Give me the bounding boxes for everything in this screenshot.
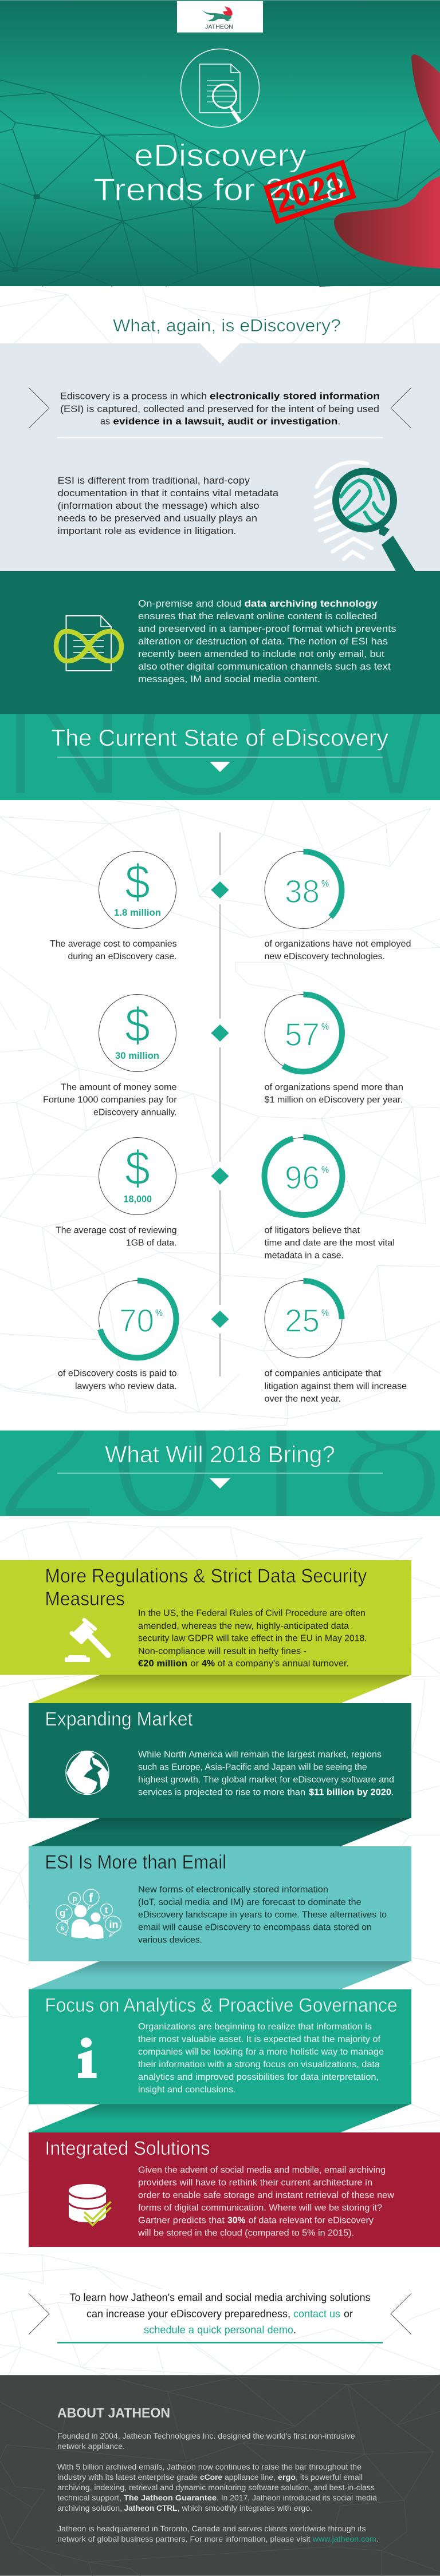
body text: highest growth. The global market for eDiscovery software and xyxy=(138,1775,394,1785)
ghost word: N xyxy=(0,631,130,836)
icon: social people xyxy=(56,1889,121,1939)
timeline xyxy=(211,832,229,1376)
title: eDiscovery xyxy=(134,137,307,173)
header banner xyxy=(0,0,440,286)
band: current state xyxy=(0,714,440,800)
body text xyxy=(138,1750,394,1798)
body text: companies will be looking for a more holistic way to manage xyxy=(138,2047,384,2057)
icon: document with infinity xyxy=(56,616,121,671)
stat: 1.8 million: during an eDiscovery case. xyxy=(68,952,176,961)
footer text: ergo xyxy=(278,2473,296,2482)
stat: 38 percent: 38 xyxy=(285,873,320,910)
archiving text: messages, IM and social media content. xyxy=(138,674,320,684)
heading: What Will 2018 Bring? xyxy=(105,1441,335,1467)
body text xyxy=(138,2166,394,2238)
stat: 18,000: 18,000 xyxy=(124,1193,152,1204)
logo fox xyxy=(202,6,233,21)
stat: 38 percent: new eDiscovery technologies. xyxy=(265,952,385,961)
left chevron xyxy=(29,2293,49,2334)
body text: their information with a strong focus on visualizations, data xyxy=(138,2060,380,2069)
body text: amended, whereas the new, highly-anticipated data xyxy=(138,1621,349,1631)
footer text: technical support, xyxy=(57,2494,121,2502)
body text: email will cause eDiscovery to encompass data stored on xyxy=(138,1923,372,1933)
logo wordmark: JATHEON xyxy=(205,23,233,30)
heading xyxy=(45,1565,367,1610)
stat: 38 percent: of organizations have not employed xyxy=(265,939,411,949)
stat: 30 million: 30 million xyxy=(115,1050,159,1061)
footer text: archiving, indexing, retrieval and dynamic monitoring software solution, and best-in-class xyxy=(57,2483,375,2492)
stat: 25 percent: % xyxy=(321,1308,329,1318)
title xyxy=(93,137,345,207)
stat: 70 percent: 70 xyxy=(119,1303,154,1339)
panel: analytics xyxy=(29,1989,411,2133)
icon: social people: g xyxy=(60,1908,65,1918)
right chevron xyxy=(391,387,411,428)
body text: €20 million xyxy=(138,1659,187,1669)
definition text: evidence in a lawsuit, audit or investigation xyxy=(113,416,337,427)
stat: 18,000: 1GB of data. xyxy=(126,1238,177,1248)
stat: 1.8 million xyxy=(50,852,177,961)
call to action xyxy=(29,2292,411,2343)
body text xyxy=(138,2022,384,2095)
stat: 96 percent: % xyxy=(321,1165,329,1175)
icon: social people: in xyxy=(109,1919,118,1930)
body text: providers will have to rethink their current architecture in xyxy=(138,2178,372,2188)
footer text: Jatheon CTRL xyxy=(124,2504,178,2512)
body text: Organizations are beginning to realize that information is xyxy=(138,2022,372,2032)
stat: 96 percent: 96 xyxy=(285,1160,320,1196)
footer heading: ABOUT JATHEON xyxy=(57,2405,170,2421)
title: Trends for 2018 xyxy=(93,172,345,207)
body text: 4% xyxy=(202,1659,215,1669)
icon: social people: f xyxy=(89,1892,93,1905)
body text: Non-compliance will result in hefty fines - xyxy=(138,1647,307,1656)
stat: 57 percent xyxy=(265,995,403,1105)
stat: 30 million: eDiscovery annually. xyxy=(93,1108,177,1117)
body text: (IoT, social media and IM) are forecast to dominate the xyxy=(138,1898,362,1908)
archiving text: On-premise and cloud xyxy=(138,598,242,609)
body text: forms of digital communication. Where will we be storing it? xyxy=(138,2203,382,2213)
stat: 96 percent: of litigators believe that xyxy=(265,1226,360,1235)
footer text: . xyxy=(377,2535,379,2543)
body text xyxy=(138,1609,367,1669)
heading: ESI Is More than Email xyxy=(45,1851,226,1873)
footer text xyxy=(57,2432,379,2543)
heading: The Current State of eDiscovery xyxy=(51,725,388,751)
esi text: ESI is different from traditional, hard-copy xyxy=(57,475,250,486)
icon: fingerprint magnifier xyxy=(316,462,394,559)
definition text: . xyxy=(337,416,340,427)
stat: 70 percent: of eDiscovery costs is paid to xyxy=(58,1369,177,1379)
icon: database check xyxy=(69,2184,111,2225)
cta text: or xyxy=(344,2308,353,2320)
esi text xyxy=(57,475,279,536)
red shapes xyxy=(411,54,440,143)
icon: gavel xyxy=(65,1620,108,1662)
stat: 38 percent: % xyxy=(321,879,329,889)
body text: eDiscovery landscape in years to come. These alternatives to xyxy=(138,1910,387,1920)
stat: 30 million xyxy=(43,995,177,1117)
footer text: , which smoothly integrates with ergo. xyxy=(178,2504,312,2512)
body text: order to enable safe storage and instant retrieval of these new xyxy=(138,2191,394,2201)
definition text xyxy=(60,391,380,427)
cta text: can increase your eDiscovery preparedness, xyxy=(87,2308,290,2320)
panel: definition xyxy=(0,343,440,571)
stat: 30 million: The amount of money some xyxy=(61,1083,177,1092)
body text: analytics and improved possibilities for data interpretation, xyxy=(138,2072,379,2082)
cta text: To learn how Jatheon's email and social media archiving solutions xyxy=(70,2292,370,2304)
icon: info xyxy=(78,2037,96,2078)
archiving text: data archiving technology xyxy=(245,598,378,609)
footer mesh xyxy=(0,2375,440,2576)
heading: Expanding Market xyxy=(45,1708,193,1730)
footer text: network appliance. xyxy=(57,2442,125,2451)
footer text: The Jatheon Guarantee xyxy=(124,2494,217,2502)
esi text: needs to be preserved and usually plays an xyxy=(57,513,257,524)
icon: social people: s xyxy=(60,1924,64,1932)
body text: of data relevant for eDiscovery xyxy=(249,2216,374,2226)
panel: esi is more than email xyxy=(29,1846,411,1990)
body text: of a company's annual turnover. xyxy=(218,1659,349,1669)
icon: social people: t xyxy=(105,1905,108,1916)
ghost number: 1 xyxy=(222,1353,334,1577)
heading: what is ediscovery: What, again, is eDiscovery? xyxy=(113,315,341,335)
archiving text xyxy=(138,598,396,684)
stat: 18,000: $ xyxy=(125,1141,150,1195)
footer text: industry with its latest enterprise grade xyxy=(57,2473,198,2482)
stat: 1.8 million: $ xyxy=(125,855,150,909)
panel: regulations xyxy=(0,1560,411,1704)
archiving text: also other digital communication channels such as text xyxy=(138,661,391,672)
footer text: Founded in 2004, Jatheon Technologies Inc. designed the world's first non-intrusive xyxy=(57,2432,355,2440)
footer text: . In 2017, Jatheon introduced its social media xyxy=(217,2494,378,2502)
body text: Gartner predicts that xyxy=(138,2216,225,2226)
stat: 25 percent: litigation against them will increase xyxy=(265,1382,407,1391)
arrow xyxy=(210,762,230,772)
body text: In the US, the Federal Rules of Civil Procedure are often xyxy=(138,1609,366,1619)
panel: data archiving xyxy=(0,571,440,714)
stat: 57 percent: of organizations spend more than xyxy=(265,1083,403,1092)
body text xyxy=(138,1885,387,1945)
stat: 57 percent: % xyxy=(321,1022,329,1032)
definition text: (ESI) is captured, collected and preserved for the intent of being used xyxy=(60,403,379,414)
footer text: With 5 billion archived emails, Jatheon now continues to raise the bar throughout the xyxy=(57,2463,362,2471)
heading: Focus on Analytics & Proactive Governance xyxy=(45,1995,398,2016)
body text: insight and conclusions. xyxy=(138,2085,236,2095)
body text: or xyxy=(190,1659,199,1669)
stat: 70 percent: lawyers who review data. xyxy=(75,1382,177,1391)
stat: 1.8 million: The average cost to companies xyxy=(50,939,177,949)
stat: 30 million: Fortune 1000 companies pay for xyxy=(43,1095,177,1105)
ghost number xyxy=(6,1431,435,1516)
stat: 57 percent: $1 million on eDiscovery per year. xyxy=(265,1095,403,1105)
footer text: , its powerful email xyxy=(296,2473,363,2482)
body text: their most valuable asset. It is expected that the majority of xyxy=(138,2035,381,2044)
stat: 25 percent: over the next year. xyxy=(265,1394,341,1404)
stamp: 2021: 2021 xyxy=(270,163,349,220)
body text: New forms of electronically stored information xyxy=(138,1885,328,1895)
stat: 25 percent: 25 xyxy=(285,1303,320,1339)
ghost word: O xyxy=(131,631,273,836)
right chevron xyxy=(391,2293,411,2334)
stat: 25 percent: of companies anticipate that xyxy=(265,1369,382,1379)
icon: document with magnifier xyxy=(181,49,259,127)
esi text: documentation in that it contains vital metadata xyxy=(57,488,279,498)
stat: 70 percent: % xyxy=(155,1308,163,1318)
esi text: important role as evidence in litigation. xyxy=(57,525,236,536)
icon: social people: + xyxy=(65,1907,68,1912)
heading: Measures xyxy=(45,1588,125,1610)
body text: services is projected to rise to more than xyxy=(138,1788,305,1798)
body text: such as Europe, Asia-Pacific and Japan will be seeing the xyxy=(138,1763,367,1772)
ghost word xyxy=(16,714,422,795)
icon: social people: p xyxy=(72,1894,77,1903)
panel: expanding market xyxy=(29,1703,411,1847)
definition text: Ediscovery is a process in which xyxy=(60,391,207,402)
stat: 18,000: The average cost of reviewing xyxy=(56,1226,177,1235)
archiving text: alteration or destruction of data. The notion of ESI has xyxy=(138,636,388,647)
footer text: cCore xyxy=(200,2473,223,2482)
body text: While North America will remain the largest market, regions xyxy=(138,1750,382,1760)
stat: 18,000 xyxy=(56,1138,177,1248)
footer text: Jatheon is headquartered in Toronto, Canada and serves clients worldwide through its xyxy=(57,2524,366,2533)
heading: Integrated Solutions xyxy=(45,2138,210,2159)
stat: 96 percent: time and date are the most vital xyxy=(265,1238,395,1248)
arrow xyxy=(210,1478,230,1489)
header mesh lines xyxy=(0,80,440,286)
stat: 38 percent xyxy=(265,852,411,961)
cta text: contact us xyxy=(293,2308,340,2320)
footer text: archiving solution, xyxy=(57,2504,122,2512)
body text: security law GDPR will take effect in the EU in May 2018. xyxy=(138,1634,367,1644)
left chevron xyxy=(29,387,49,428)
archiving text: recently been amended to include not only email, but xyxy=(138,648,384,659)
icon: globe xyxy=(66,1751,109,1795)
cta text xyxy=(70,2292,370,2336)
footer: about jatheon xyxy=(0,2375,440,2576)
body text: will be stored in the cloud (compared to 5% in 2015). xyxy=(138,2229,354,2238)
footer text: www.jatheon.com xyxy=(312,2535,376,2543)
cta text: . xyxy=(293,2324,296,2336)
definition text: as xyxy=(100,416,110,427)
cta text: schedule a quick personal demo xyxy=(144,2324,293,2336)
stat: 96 percent: metadata in a case. xyxy=(265,1251,344,1260)
body text: $11 billion by 2020 xyxy=(309,1788,391,1798)
stat: 57 percent: 57 xyxy=(285,1016,320,1053)
stat: 96 percent xyxy=(265,1137,395,1260)
body text: 30% xyxy=(227,2216,246,2226)
definition text: electronically stored information xyxy=(210,391,380,402)
stat: 25 percent xyxy=(265,1281,407,1404)
heading: More Regulations & Strict Data Security xyxy=(45,1565,367,1587)
stat: 70 percent xyxy=(58,1281,177,1391)
body text: . xyxy=(391,1788,394,1798)
stat: 1.8 million: 1.8 million xyxy=(114,907,161,918)
esi text: (information about the message) which also xyxy=(57,500,259,511)
panel: integrated solutions xyxy=(29,2132,440,2247)
body text: various devices. xyxy=(138,1936,202,1945)
footer text: network of global business partners. For more information, please visit xyxy=(57,2535,311,2543)
band: what will 2018 bring xyxy=(0,1431,440,1516)
archiving text: ensures that the relevant online content is collected xyxy=(138,611,377,622)
body text: Given the advent of social media and mobile, email archiving xyxy=(138,2166,386,2175)
logo box xyxy=(177,1,263,33)
ghost number: 0 xyxy=(107,1339,218,1562)
archiving text: and preserved in a tamper-proof format which prevents xyxy=(138,623,396,634)
footer text: appliance line, xyxy=(225,2473,276,2482)
stat: 30 million: $ xyxy=(125,998,150,1052)
